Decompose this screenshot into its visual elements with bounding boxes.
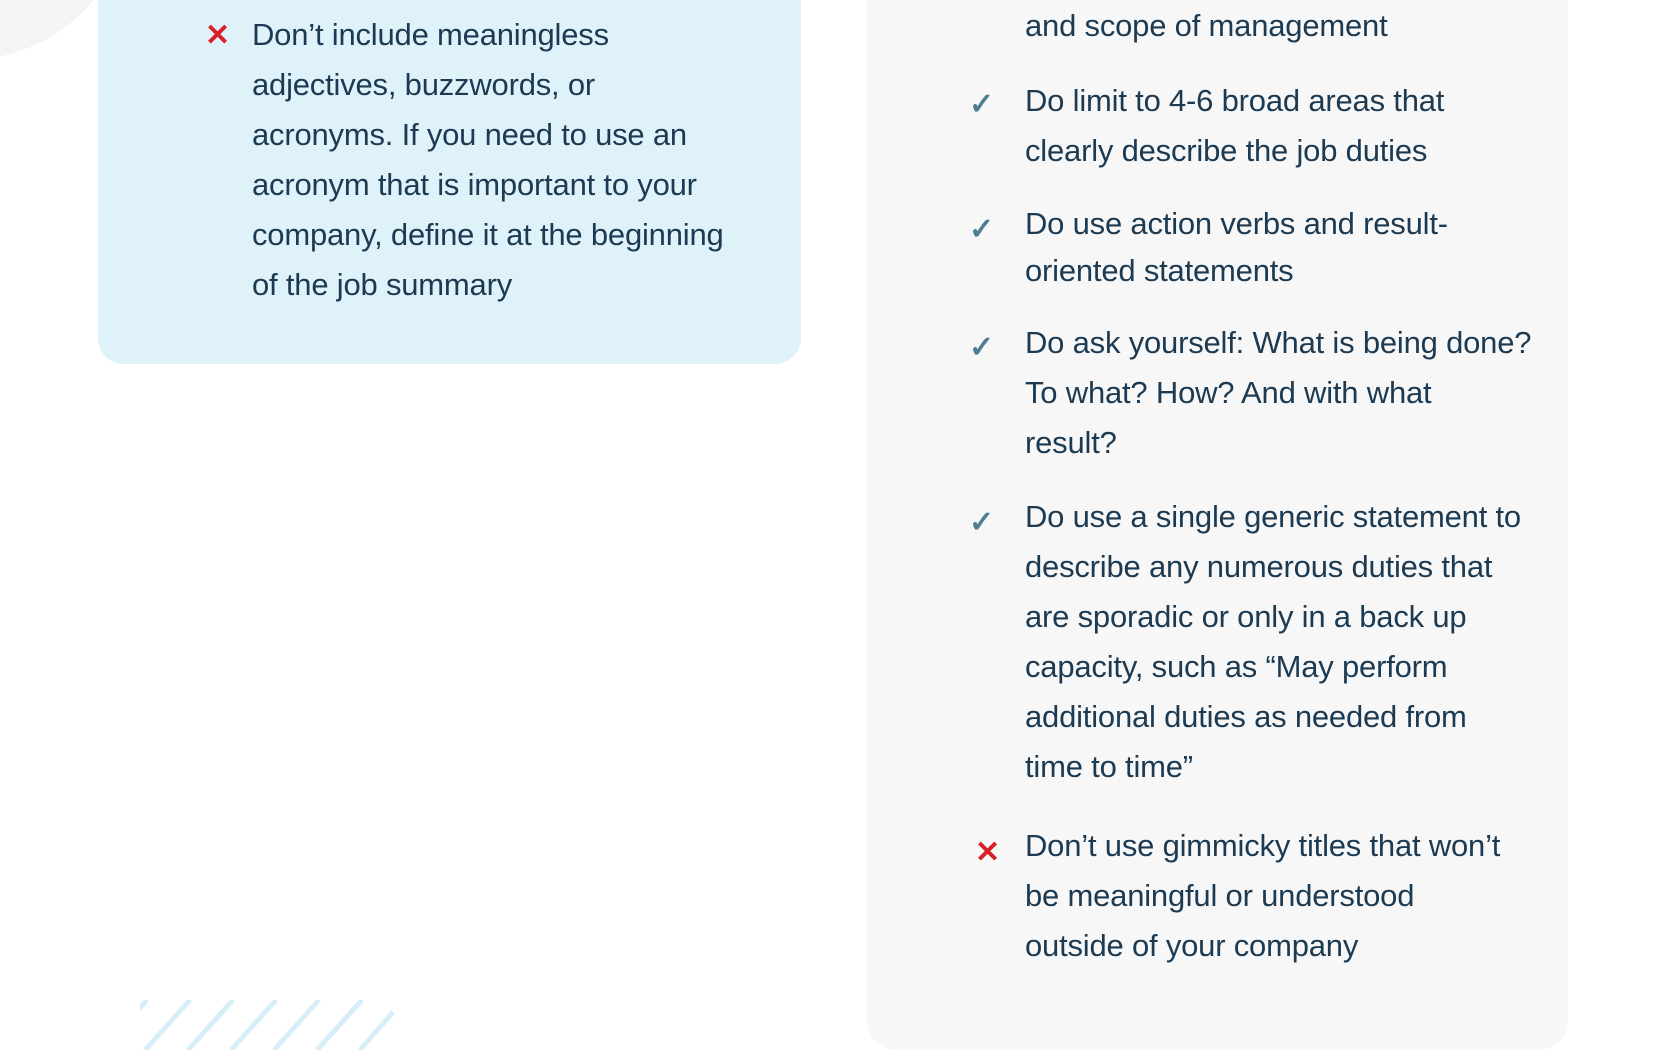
text: don't include: acronyms. If you need to use an: [252, 117, 687, 152]
text: ask yourself: To what? How? And with what: [1025, 375, 1431, 410]
panel: right do's: [867, 0, 1568, 1050]
text: don't include: adjectives, buzzwords, or: [252, 67, 595, 102]
text: generic statement: time to time”: [1025, 749, 1193, 784]
icon: check 3: ✓: [969, 331, 994, 364]
text: don't include: [252, 17, 724, 302]
text: ask yourself: result?: [1025, 425, 1117, 460]
text: generic statement: [1025, 499, 1521, 784]
text: gimmicky: be meaningful or understood: [1025, 878, 1414, 913]
text: scope: and scope of management: [1025, 8, 1387, 43]
text: limit: clearly describe the job duties: [1025, 133, 1427, 168]
panel: left don'ts: [98, 0, 801, 364]
text: limit: Do limit to 4-6 broad areas that: [1025, 83, 1444, 118]
text: ask yourself: [1025, 325, 1531, 460]
text: don't include: Don’t include meaningless: [252, 17, 609, 52]
text: generic statement: are sporadic or only in a back up: [1025, 599, 1466, 634]
text: action verbs: oriented statements: [1025, 253, 1293, 288]
text: don't include: company, define it at the beginning: [252, 217, 724, 252]
text: generic statement: Do use a single generic statement to: [1025, 499, 1521, 534]
decorative stripes: [140, 1000, 395, 1050]
icon: check 4: ✓: [969, 506, 994, 539]
text: gimmicky: [1025, 828, 1500, 963]
text: action verbs: Do use action verbs and result-: [1025, 206, 1448, 241]
text: gimmicky: outside of your company: [1025, 928, 1358, 963]
icon: check 2: ✓: [969, 213, 994, 246]
text: generic statement: additional duties as needed from: [1025, 699, 1467, 734]
text: don't include: acronym that is important to your: [252, 167, 697, 202]
text: ask yourself: Do ask yourself: What is being done?: [1025, 325, 1531, 360]
text: limit: [1025, 83, 1444, 168]
text: generic statement: describe any numerous duties that: [1025, 549, 1492, 584]
text: action verbs: [1025, 206, 1448, 288]
text: generic statement: capacity, such as “May perform: [1025, 649, 1447, 684]
text: don't include: of the job summary: [252, 267, 512, 302]
icon: red x: ✕: [975, 836, 1000, 869]
icon: check 1: ✓: [969, 88, 994, 121]
text: gimmicky: Don’t use gimmicky titles that won’t: [1025, 828, 1500, 863]
icon: red x: ✕: [205, 19, 230, 52]
decorative gray curve: [0, 0, 130, 60]
